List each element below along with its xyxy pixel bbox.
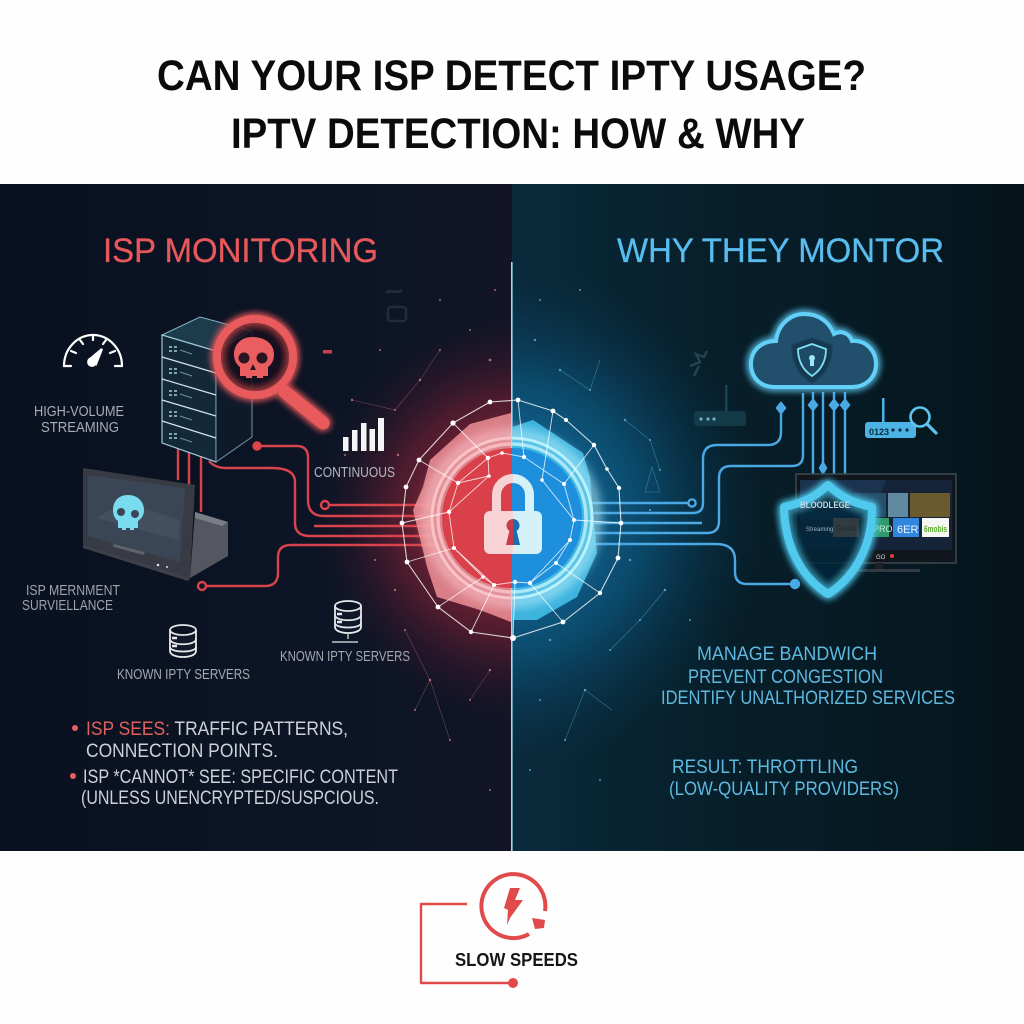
icon: TV with streaming app: GO (876, 555, 886, 561)
mesh nodes (400, 398, 623, 641)
title: CAN YOUR ISP DETECT IPTY USAGE? (157, 52, 866, 100)
label: ISP surveillance: ISP MERNMENT (26, 583, 120, 599)
text: reasons list: IDENTIFY UNALTHORIZED SERVICES (661, 688, 955, 709)
text: reasons list: MANAGE BANDWICH (697, 644, 877, 665)
red circuit lines (178, 442, 440, 590)
label: ISP surveillance (22, 583, 120, 614)
icon: glowing shield: BLOODLEGE (800, 500, 850, 510)
icon: server rack (162, 317, 252, 462)
blue circuit lines (590, 392, 849, 588)
icon: dim router (694, 385, 746, 426)
bullet list: what ISP sees: (UNLESS UNENCRYPTED/SUSPCIOUS. (81, 788, 379, 809)
bullet list: what ISP sees: ISP SEES: TRAFFIC PATTERNS, (86, 719, 348, 740)
icon: database left (170, 625, 196, 657)
icon: faint background glyph (386, 290, 406, 321)
icon: cloud with shield (751, 314, 876, 387)
outer rings (432, 438, 592, 598)
front face (162, 335, 216, 462)
text: reasons list: PREVENT CONGESTION (688, 667, 883, 688)
icon: glowing shield (784, 485, 872, 594)
heading: why they monitor: WHY THEY MONTOR (617, 232, 944, 270)
icon: circular arrow with bolt (481, 874, 545, 938)
red half disc (442, 448, 512, 588)
icon: router with magnifier (865, 398, 936, 438)
icon: faint glyph (690, 351, 707, 376)
label: high-volume streaming: HIGH-VOLUME (34, 403, 124, 420)
icon: monitor with skull (83, 468, 228, 581)
frame (83, 468, 195, 578)
icon: TV with streaming app: 6mobis (924, 524, 947, 535)
label: known servers left: KNOWN IPTY SERVERS (117, 666, 250, 683)
colored hexagonal blobs (413, 413, 597, 622)
heading: ISP monitoring: ISP MONITORING (103, 232, 378, 270)
tile green (872, 518, 889, 537)
icon: TV with streaming app: Gaoda (836, 524, 856, 533)
tile blue (893, 518, 919, 537)
label: ISP surveillance: SURVIELLANCE (22, 598, 113, 614)
icon: glowing shield: Streaming (806, 527, 833, 533)
network mesh (402, 400, 621, 638)
box (190, 512, 228, 578)
thumbnails (855, 493, 886, 517)
connector (421, 904, 513, 983)
title: IPTV DETECTION: HOW & WHY (231, 110, 805, 158)
icon: small red dash (323, 350, 332, 354)
icon: speedometer (64, 335, 122, 366)
panel: dark background (0, 184, 1024, 851)
central lock emblem (400, 398, 623, 641)
icon: TV with streaming app: 6ER (897, 524, 918, 536)
label: SLOW SPEEDS (455, 949, 578, 970)
tile orange (833, 518, 859, 537)
base (83, 540, 190, 581)
top face (162, 317, 252, 351)
text: result: RESULT: THROTTLING (672, 757, 858, 778)
cloud shield (792, 338, 832, 383)
text: reasons list (661, 644, 955, 709)
icon: TV with streaming app (796, 474, 956, 572)
label: continuous: CONTINUOUS (314, 464, 395, 481)
label: high-volume streaming: STREAMING (41, 419, 119, 436)
blue half disc (512, 448, 582, 588)
icon: red magnifier with skull (217, 319, 323, 423)
icon: router with magnifier: 0123 (869, 427, 889, 437)
rack ports (169, 347, 177, 438)
footer: slow speeds (421, 874, 578, 988)
text: result: (LOW-QUALITY PROVIDERS) (669, 779, 899, 800)
text: result (669, 757, 899, 800)
bullet list: what ISP sees (70, 719, 398, 809)
rack dividers (162, 357, 216, 438)
bullet list: what ISP sees: ISP *CANNOT* SEE: SPECIFIC CONTENT (83, 767, 398, 788)
icon: signal bars (343, 418, 384, 451)
padlock (484, 478, 542, 554)
cyan skull (113, 495, 144, 530)
bullet list: what ISP sees: CONNECTION POINTS. (86, 741, 278, 762)
title (157, 52, 866, 158)
particle field (344, 289, 691, 791)
tile white (922, 518, 949, 537)
screen (88, 475, 185, 562)
red skull (234, 337, 274, 378)
right face (216, 331, 252, 462)
label: known servers right: KNOWN IPTY SERVERS (280, 648, 410, 665)
ring glow (428, 434, 596, 602)
icon: TV with streaming app: PRO (873, 524, 893, 534)
label: high-volume streaming (34, 403, 124, 436)
icon: database right (332, 601, 361, 642)
